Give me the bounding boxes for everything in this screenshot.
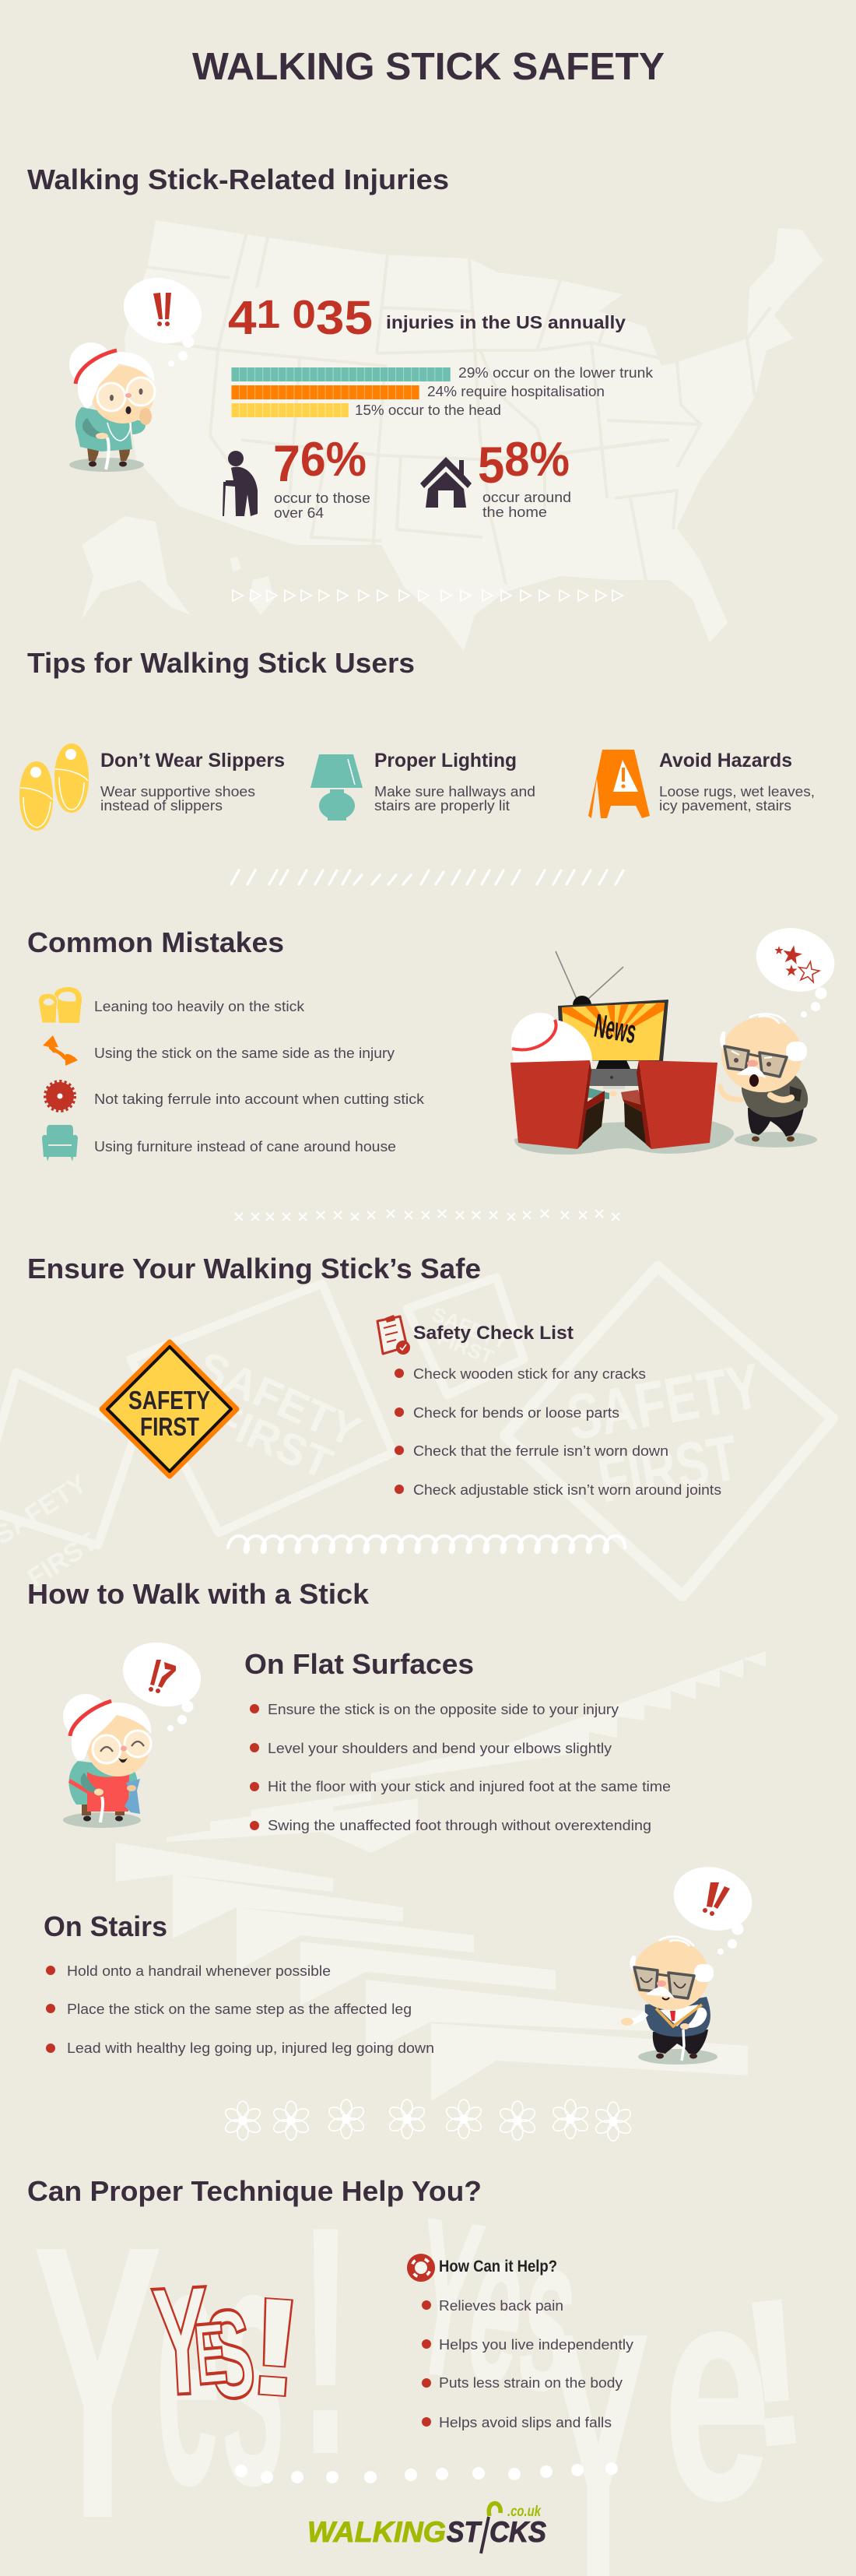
tip: hazards — [659, 750, 815, 814]
background: safety first signs — [0, 1267, 833, 1596]
subheading: how can it help: How Can it Help? — [439, 2258, 557, 2276]
mistake: ferrule: Not taking ferrule into account when cutting stick — [94, 1091, 425, 1107]
list: benefits: Relieves back pain — [439, 2298, 563, 2314]
background: safety first signs: SAFETY — [429, 1302, 511, 1354]
bar chart: injury breakdown: 15% occur to the head — [355, 402, 501, 418]
graphic: YES! lettering — [149, 2253, 312, 2428]
heading: can technique help: Can Proper Technique Help You? — [27, 2175, 482, 2207]
stat: injuries in the US: 1 0 — [257, 292, 316, 336]
stat: 58 percent — [478, 433, 571, 520]
list: safety checks: Check that the ferrule isn’t worn down — [413, 1443, 668, 1459]
stat: injuries in the US — [228, 291, 626, 344]
icon: safety first diamond sign: FIRST — [140, 1412, 199, 1441]
stat: 58 percent: occur around — [482, 490, 571, 505]
background: yes lettering: es — [156, 2167, 286, 2559]
graphic: YES! lettering: ! — [239, 2266, 312, 2427]
list: safety checks — [395, 1366, 721, 1498]
icon: safety first diamond sign — [102, 1342, 237, 1476]
bar chart: injury breakdown: 29% occur on the lower trunk — [458, 365, 654, 381]
icon: swap arrows — [43, 1035, 78, 1066]
heading: tips: Tips for Walking Stick Users — [27, 647, 415, 679]
stat: 58 percent: 5 — [478, 436, 504, 494]
illustration: couple watching TV — [510, 919, 842, 1154]
background: safety first signs: FIRST — [23, 1527, 103, 1594]
heading: mistakes: Common Mistakes — [27, 926, 284, 958]
list: safety checks: Check for bends or loose parts — [413, 1405, 619, 1421]
list: stairs steps: Lead with healthy leg going up, injured leg going down — [67, 2040, 434, 2056]
icon: life ring — [409, 2255, 433, 2280]
list: flat surface steps: Ensure the stick is on the opposite side to your injury — [268, 1702, 619, 1717]
illustration: couple watching TV: News — [591, 1007, 639, 1050]
subheading: on stairs: On Stairs — [44, 1910, 167, 1942]
background: safety first signs: FIRST — [205, 1392, 340, 1488]
list: stairs steps: Place the stick on the same step as the affected leg — [67, 2001, 412, 2017]
tip: hazards: Avoid Hazards — [659, 750, 792, 771]
stat: 58 percent: 8% — [504, 433, 570, 487]
tip: hazards: Loose rugs, wet leaves, — [659, 784, 815, 800]
stat: 58 percent: the home — [482, 504, 547, 520]
list: safety checks: Check adjustable stick isn’t worn around joints — [413, 1482, 721, 1498]
logo: walkingsticks.co.uk: .co.uk — [507, 2504, 542, 2520]
background: US map — [82, 220, 823, 651]
background: safety first signs: FIRST — [593, 1422, 743, 1516]
background: yes lettering: Yes — [398, 2169, 592, 2441]
icon: kettlebells — [38, 987, 82, 1023]
mistake: same side: Using the stick on the same side as the injury — [94, 1046, 395, 1061]
list: flat surface steps — [250, 1702, 671, 1833]
stat: 76 percent — [273, 433, 370, 521]
character: surprised grandma with thought bubble — [69, 268, 210, 472]
background: yes lettering — [33, 2159, 821, 2576]
list: stairs steps: Hold onto a handrail whenever possible — [67, 1963, 331, 1979]
icon: lamp — [310, 754, 363, 821]
stat: 76 percent: 7 — [273, 434, 300, 492]
stat: injuries in the US: 35 — [316, 291, 373, 344]
background: stairs — [116, 1651, 766, 2101]
list: benefits: Helps you live independently — [439, 2337, 633, 2353]
heading: injuries: Walking Stick-Related Injuries — [27, 163, 449, 195]
list: flat surface steps: Level your shoulders and bend your elbows slightly — [268, 1741, 612, 1756]
background: yes lettering: ! — [297, 2159, 354, 2522]
stat: injuries in the US: injuries in the US annually — [386, 312, 626, 332]
background: yes lettering: e — [663, 2217, 771, 2565]
list: stairs steps — [46, 1963, 434, 2056]
heading: ensure safe: Ensure Your Walking Stick’s Safe — [27, 1253, 481, 1284]
logo: walkingsticks.co.uk: WALKING — [307, 2516, 446, 2548]
icon: armchair — [42, 1125, 78, 1161]
tip: lighting — [374, 750, 535, 814]
subheading: on flat surfaces: On Flat Surfaces — [244, 1648, 474, 1680]
logo: walkingsticks.co.uk: CKS — [489, 2516, 546, 2548]
background: safety first signs: SAFETY — [191, 1341, 368, 1457]
graphic: YES! lettering: Y — [149, 2253, 214, 2428]
stat: 76 percent: 6% — [300, 433, 367, 487]
subheading: checklist: Safety Check List — [413, 1323, 574, 1344]
list: safety checks: Check wooden stick for any cracks — [413, 1366, 646, 1382]
logo: walkingsticks.co.uk: ST — [447, 2516, 482, 2548]
character: old man in suit with thought bubble — [621, 1858, 760, 2065]
list: benefits: Helps avoid slips and falls — [439, 2415, 612, 2430]
icon: clipboard checklist — [377, 1315, 410, 1355]
background: yes lettering: ! — [728, 2253, 821, 2493]
character: happy grandma with thought bubble — [63, 1632, 209, 1828]
title: WALKING STICK SAFETY — [192, 46, 665, 88]
icon: hazard sign — [588, 750, 650, 818]
tip: lighting: stairs are properly lit — [374, 798, 510, 814]
list: flat surface steps: Swing the unaffected foot through without overextending — [268, 1818, 651, 1833]
list: flat surface steps: Hit the floor with your stick and injured foot at the same time — [268, 1779, 671, 1794]
stat: injuries in the US: 4 — [228, 291, 257, 344]
graphic: YES! lettering: S — [199, 2282, 262, 2427]
tip: lighting: Proper Lighting — [374, 750, 517, 771]
stat: 76 percent: over 64 — [274, 505, 324, 521]
tip: slippers: Don’t Wear Slippers — [100, 750, 285, 771]
icon: slippers — [19, 743, 89, 831]
tip: hazards: icy pavement, stairs — [659, 798, 791, 814]
tip: slippers: instead of slippers — [100, 798, 223, 814]
icon: elderly person with cane — [223, 451, 258, 516]
bar chart: injury breakdown — [231, 365, 654, 418]
icon: saw blade — [46, 1082, 74, 1110]
tip: lighting: Make sure hallways and — [374, 784, 535, 800]
mistake: leaning: Leaning too heavily on the stick — [94, 999, 305, 1014]
icon: safety first diamond sign: SAFETY — [128, 1386, 210, 1415]
stat: 76 percent: occur to those — [274, 490, 370, 506]
icon: house — [420, 457, 472, 508]
logo: walkingsticks.co.uk — [307, 2504, 546, 2553]
list: benefits — [422, 2298, 633, 2430]
heading: how to walk: How to Walk with a Stick — [27, 1578, 370, 1610]
list: benefits: Puts less strain on the body — [439, 2375, 623, 2391]
background: safety first signs: SAFETY — [562, 1351, 766, 1454]
graphic: YES! lettering: E — [191, 2304, 230, 2403]
tip: slippers: Wear supportive shoes — [100, 784, 255, 800]
bar chart: injury breakdown: 24% require hospitalisation — [427, 384, 605, 399]
mistake: furniture: Using furniture instead of cane around house — [94, 1139, 396, 1154]
background: safety first signs: FIRST — [434, 1326, 497, 1369]
tip: slippers — [100, 750, 285, 814]
